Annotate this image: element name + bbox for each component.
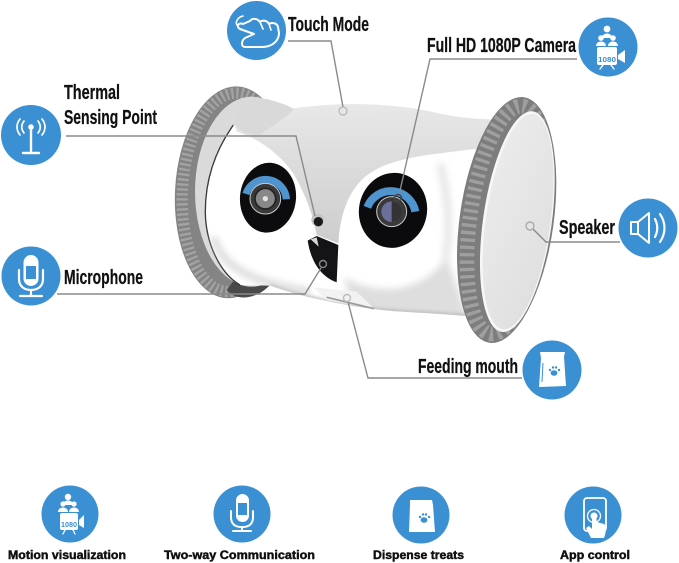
icon: camera 1080 xyxy=(578,18,638,76)
icon: camera 1080: 1080 xyxy=(598,55,616,64)
robot body xyxy=(205,119,503,317)
callout: feeding line xyxy=(344,294,522,378)
left face edge line xyxy=(205,125,240,285)
icon: motion camera: 1080 xyxy=(61,522,77,529)
label: speaker: Speaker xyxy=(559,217,615,239)
label: thermal sensing point: Thermal xyxy=(64,82,120,104)
callout: camera line xyxy=(394,59,577,202)
icon: speaker xyxy=(618,198,678,258)
callout: thermal line xyxy=(66,136,315,216)
callout: microphone line xyxy=(57,260,326,294)
icon: touch hand xyxy=(227,1,286,60)
icon: dispense bag xyxy=(392,486,450,544)
caption: motion visualization: Motion visualization xyxy=(8,550,126,562)
robot photo illustration xyxy=(170,83,570,349)
right eye xyxy=(352,166,434,254)
top shell xyxy=(233,99,503,243)
left wheel xyxy=(170,83,308,301)
bottom feature: app control xyxy=(560,486,630,562)
bottom feature: dispense treats xyxy=(373,486,464,562)
feeding mouth xyxy=(313,287,374,309)
label: touch mode: Touch Mode xyxy=(288,14,369,36)
icon: two-way microphone xyxy=(214,486,270,542)
callout: touch mode line xyxy=(288,41,347,115)
nose microphone xyxy=(308,236,338,282)
icon: treat bag xyxy=(522,340,582,400)
bottom feature: two-way communication xyxy=(164,486,315,562)
icon: phone touch xyxy=(564,486,622,544)
ear highlight xyxy=(233,99,294,135)
caption: two-way communication: Two-way Communication xyxy=(164,550,315,562)
label: microphone: Microphone xyxy=(64,267,143,289)
icon: thermal antenna xyxy=(1,105,61,165)
icon: microphone xyxy=(2,246,60,306)
label: thermal sensing point: Sensing Point xyxy=(64,107,157,129)
caption: dispense treats: Dispense treats xyxy=(373,550,464,562)
label: full hd camera: Full HD 1080P Camera xyxy=(427,35,577,57)
right wheel xyxy=(443,91,570,349)
callout: speaker line xyxy=(526,222,620,242)
label: feeding mouth: Feeding mouth xyxy=(418,356,518,378)
body shading xyxy=(213,163,470,323)
caption: app control: App control xyxy=(560,550,630,562)
bottom feature: motion visualization xyxy=(8,486,126,562)
left eye xyxy=(236,160,300,235)
thermal sensor xyxy=(311,214,324,226)
